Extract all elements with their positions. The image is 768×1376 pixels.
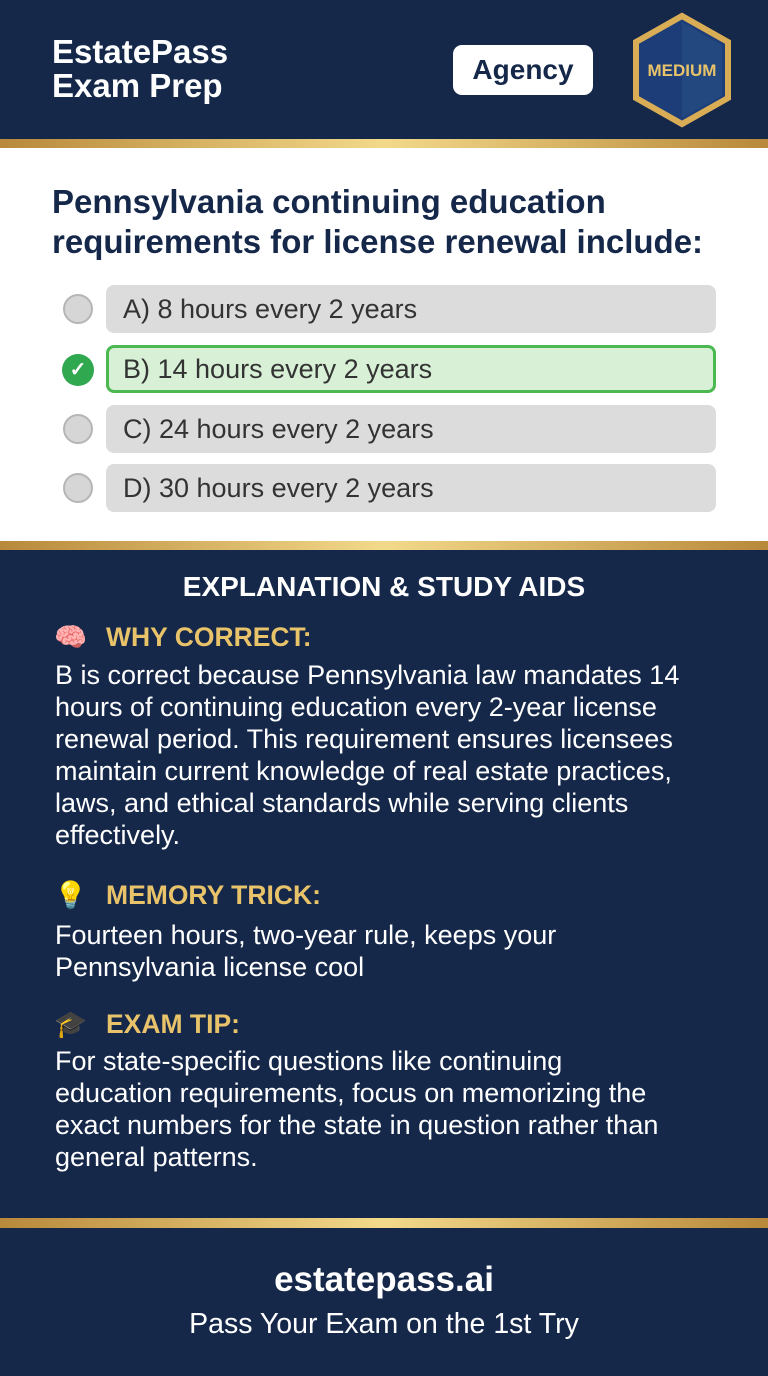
option C xyxy=(63,405,716,453)
option D xyxy=(63,464,716,512)
text: C) 24 hours every 2 years xyxy=(123,414,434,444)
header xyxy=(0,0,768,140)
why correct heading: 🧠 xyxy=(54,622,87,652)
exam tip heading: EXAM TIP: xyxy=(106,1009,240,1039)
difficulty badge: MEDIUM xyxy=(648,61,716,80)
tagline: Pass Your Exam on the 1st Try xyxy=(189,1308,579,1340)
text: B) 14 hours every 2 years xyxy=(123,354,432,384)
memory trick heading: 💡 xyxy=(54,880,87,910)
why correct heading: WHY CORRECT: xyxy=(106,622,312,652)
exam tip text xyxy=(55,1046,658,1172)
text: D) 30 hours every 2 years xyxy=(123,473,434,503)
category badge: Agency xyxy=(472,54,574,85)
option A xyxy=(63,285,716,333)
memory trick text: Fourteen hours, two-year rule, keeps your Pennsylvania license cool xyxy=(55,920,556,982)
text: A) 8 hours every 2 years xyxy=(123,294,417,324)
question panel xyxy=(0,148,768,541)
exam tip text: general patterns. xyxy=(55,1142,258,1172)
exam tip text: education requirements, focus on memorizing the xyxy=(55,1078,646,1108)
brand title: EstatePass xyxy=(52,33,228,70)
exam tip text: exact numbers for the state in question rather than xyxy=(55,1110,658,1140)
option B correct xyxy=(62,345,716,393)
question: Pennsylvania continuing education xyxy=(52,183,606,220)
brand title: Exam Prep xyxy=(52,67,223,104)
exam tip heading: 🎓 xyxy=(54,1009,87,1039)
brand title xyxy=(52,33,228,104)
question: requirements for license renewal include: xyxy=(52,223,703,260)
memory trick heading: MEMORY TRICK: xyxy=(106,880,321,910)
why correct text: B is correct because Pennsylvania law mandates 14 hours of continuing education every 2-year license renewal period. This requirement ensures licensees maintain current knowledge of real estate practices, laws, and ethical standards while serving clients effectively. xyxy=(55,660,679,850)
footer xyxy=(189,1260,579,1340)
text: ✓ xyxy=(70,359,86,381)
footer brand: estatepass.ai xyxy=(274,1260,494,1299)
exam tip text: For state-specific questions like continuing xyxy=(55,1046,562,1076)
explanation heading: EXPLANATION & STUDY AIDS xyxy=(183,571,585,602)
category badge xyxy=(453,45,593,95)
question xyxy=(52,183,703,260)
difficulty badge xyxy=(633,12,731,128)
